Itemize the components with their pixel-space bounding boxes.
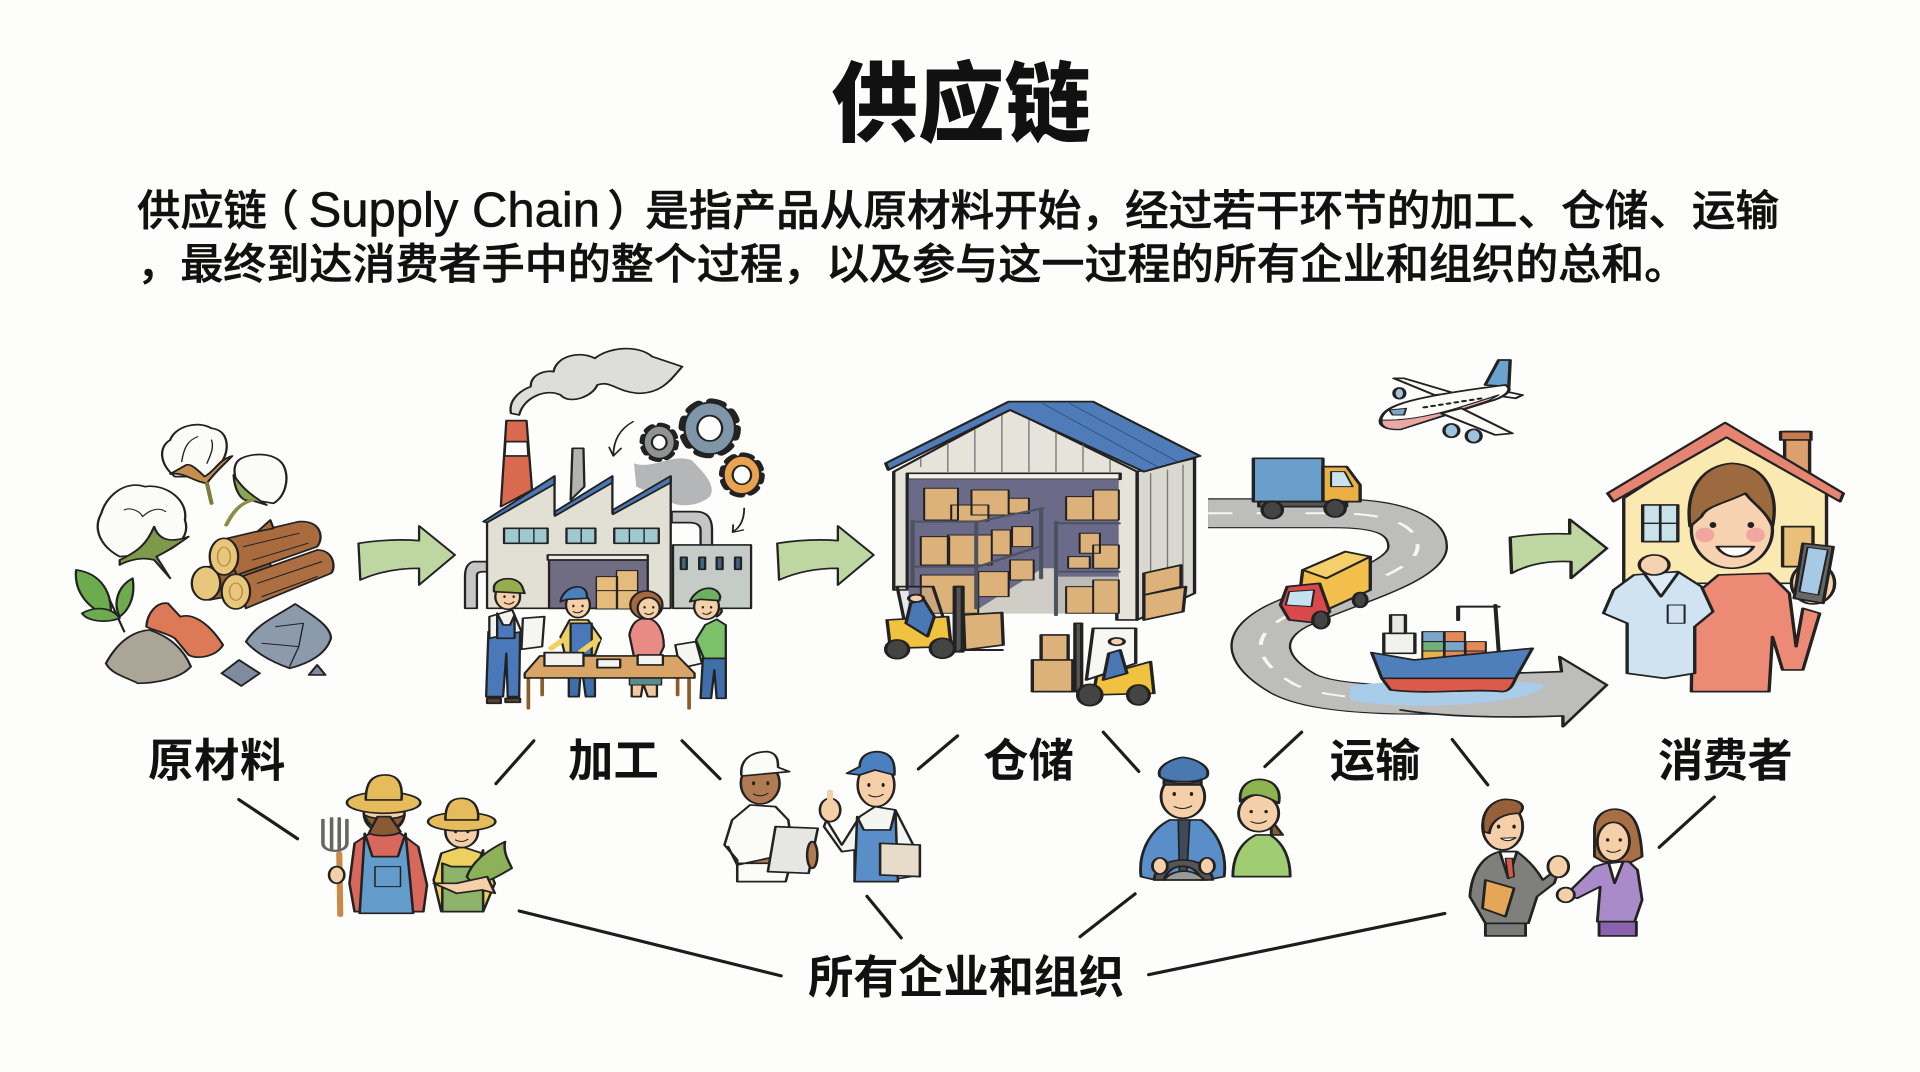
icon: house xyxy=(1608,423,1843,583)
definition text block: Supply Chain xyxy=(309,184,600,238)
step label: transport: 运输 xyxy=(1330,735,1420,786)
title: 供应链 xyxy=(831,57,1091,154)
icon: cotton bolls xyxy=(98,425,286,578)
connector lines xyxy=(239,732,1714,976)
icon: factory chimneys xyxy=(501,421,584,507)
icon: red and yellow truck xyxy=(1280,552,1370,629)
definition text block: 供应链 xyxy=(137,187,267,235)
step label: raw materials: 原材料 xyxy=(148,735,285,786)
definition text block xyxy=(137,184,1779,289)
people: transport staff xyxy=(1141,757,1290,880)
person: consumer xyxy=(1689,463,1820,692)
people: worker in pink xyxy=(629,591,664,697)
arrow: transport to consumer xyxy=(1510,519,1607,578)
arrow: processing to warehousing xyxy=(777,526,874,585)
icon: airplane xyxy=(1380,360,1522,443)
illustration: transport road xyxy=(1208,360,1607,727)
people: worker with blue cap xyxy=(551,587,601,697)
people: business representatives xyxy=(1470,799,1642,936)
people: farmers xyxy=(323,775,512,915)
icon: forklift left xyxy=(886,587,1003,659)
person: supervisor in overalls xyxy=(820,752,920,882)
icon: forklift right xyxy=(1032,623,1154,706)
label: all enterprises and organizations: 所有企业和组织 xyxy=(808,952,1124,1003)
step label: consumer: 消费者 xyxy=(1658,735,1793,786)
person: driver xyxy=(1141,757,1225,880)
icon: curved process arrows xyxy=(609,422,744,532)
definition text block: ） xyxy=(607,187,650,235)
illustration: consumer at home xyxy=(1603,423,1843,692)
person: warehouse staff in green xyxy=(1233,779,1290,877)
step label: warehousing: 仓储 xyxy=(983,735,1074,786)
definition text block: ，最终到达消费者手中的整个过程，以及参与这一过程的所有企业和组织的总和。 xyxy=(137,241,1687,289)
icon: blue shirt xyxy=(1603,555,1713,678)
people: factory supervisors xyxy=(724,752,920,882)
icon: smartphone xyxy=(1791,543,1835,604)
icon: factory building xyxy=(483,476,671,609)
icon: water xyxy=(1350,680,1544,706)
step label: processing: 加工 xyxy=(568,735,659,786)
icon: green leaves xyxy=(76,570,133,632)
illustration: warehouse and forklifts xyxy=(886,402,1200,706)
person: farmer with greens xyxy=(428,798,512,912)
person: businesswoman xyxy=(1557,809,1642,936)
person: inspector with clipboard xyxy=(724,752,818,882)
illustration: raw materials xyxy=(76,425,333,686)
definition text block: 是指产品从原材料开始，经过若干环节的加工、仓储、运输 xyxy=(645,187,1779,235)
icon: smoke cloud xyxy=(511,349,682,415)
person: farmer with pitchfork xyxy=(323,775,427,915)
icon: ores and rocks xyxy=(106,603,331,686)
icon: warehouse building xyxy=(886,402,1200,620)
icon: work table xyxy=(525,653,695,708)
arrow head of road xyxy=(1401,657,1607,727)
people: worker with paper xyxy=(486,579,544,703)
illustration: factory and workers xyxy=(465,349,761,708)
icon: wood logs xyxy=(192,520,333,609)
arrow: raw materials to processing xyxy=(358,526,455,585)
icon: machinery smoke xyxy=(634,458,712,505)
icon: gears xyxy=(643,402,761,495)
icon: side building and pipes xyxy=(465,512,751,608)
icon: shelving with boxes xyxy=(913,488,1186,620)
road xyxy=(1208,513,1563,700)
people: worker with green cap xyxy=(675,588,726,698)
icon: blue truck xyxy=(1253,458,1360,519)
person: businessman xyxy=(1470,799,1569,936)
definition text block: （ xyxy=(256,187,299,235)
icon: cargo ship xyxy=(1372,605,1532,692)
